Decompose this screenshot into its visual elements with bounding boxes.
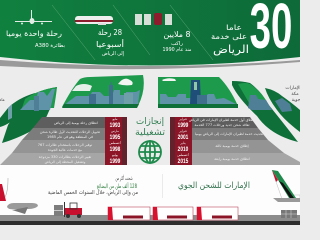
icon: cargo container 1 xyxy=(108,207,150,220)
left table text: توفير الرحلات باستخدام طائرات 767 xyxy=(38,143,92,148)
skyline panel: right leaf xyxy=(232,81,298,142)
right table years: فبراير xyxy=(178,129,187,133)
left table years: مارس xyxy=(111,129,119,133)
left table text xyxy=(38,121,100,165)
stat: passengers xyxy=(162,30,192,53)
divider xyxy=(161,174,164,198)
text block: cargo statistic: شحنت أكثر من xyxy=(116,174,133,182)
right table text: تعاقد شحن جديد ورحلات 777 الخدمة xyxy=(195,123,250,127)
header banner xyxy=(0,0,300,69)
title: 30 years serving Riyadh: عاما xyxy=(226,23,242,32)
stat: weekly flights: أسبوعيا xyxy=(96,39,124,49)
left table years xyxy=(109,117,121,165)
stat: weekly flights xyxy=(96,28,125,57)
right table years: فبراير xyxy=(178,117,187,121)
left table years: 1999 xyxy=(110,159,120,165)
panel: right timeline table xyxy=(170,117,300,165)
skyline panel: left leaf xyxy=(2,87,57,143)
right table text: انطلاق أول خدمة لطيران الإمارات في الرياض xyxy=(189,117,255,123)
right table text xyxy=(189,117,263,161)
heading: operational achievements: تشغيلية xyxy=(135,128,166,138)
text block: right side caption: مكة xyxy=(291,91,299,97)
text block: cargo statistic: 128 ألف طن من البضائع xyxy=(97,182,137,190)
stat: weekly flights: إلى الرياض xyxy=(102,51,125,57)
right table years xyxy=(177,117,189,165)
right table text: انطلاق خدمة يومية رابعة xyxy=(214,157,250,161)
left table years: 1995 xyxy=(110,135,120,141)
stat: passengers: 8 ملايين xyxy=(164,30,190,39)
right table years: أغسطس xyxy=(177,153,189,157)
left table text: تحويل الرحلات للتحديث لأول طائرة شحن xyxy=(40,129,100,134)
right table years: 1999 xyxy=(178,123,188,129)
skyline panel: centre-right leaf xyxy=(158,77,238,108)
heading: operational achievements xyxy=(135,117,166,138)
stat: daily flight xyxy=(6,29,65,49)
skyline panel: centre-left leaf xyxy=(62,75,144,108)
title: 30 years serving Riyadh xyxy=(211,0,292,63)
heading: operational achievements: إنجازات xyxy=(136,117,164,127)
title: 30 years serving Riyadh: الرياض xyxy=(213,43,249,56)
stat: passengers: منذ عام 1990 xyxy=(162,47,192,53)
left table text: مع خدمات عالية الجودة xyxy=(48,148,82,152)
skyline panel: far left leaf xyxy=(0,93,35,127)
icon: stacked boxes xyxy=(54,205,63,216)
stat: daily flight: بطائرة A380 xyxy=(35,43,65,49)
left table years: 1993 xyxy=(110,123,120,129)
stat: passengers: راكب xyxy=(171,41,184,47)
right table years: 2010 xyxy=(178,147,188,153)
skyline panel: far right leaf xyxy=(265,88,300,132)
left table text: في المنطقة وهو في عام 1985 xyxy=(47,135,93,140)
left table years: 1998 xyxy=(110,147,120,153)
text block: right side caption xyxy=(285,86,301,103)
icon: forklift xyxy=(64,202,82,218)
right table years: يناير xyxy=(179,141,186,145)
right table years: 2001 xyxy=(178,135,188,141)
left table text: انطلاق رحلة يومية إلى الرياض xyxy=(54,121,98,126)
left table text: تغيير الرحلات بطائرات 330 مزدوجة xyxy=(39,155,91,159)
icon: cargo container 2 xyxy=(153,207,193,220)
stat: weekly flights: 28 رحلة xyxy=(98,28,122,37)
icon: cargo plane left xyxy=(0,178,38,214)
panel: left timeline table xyxy=(0,117,127,165)
left table years: أغسطس xyxy=(109,141,121,145)
icon: cargo boxes right xyxy=(281,210,297,218)
text block: cargo statistic xyxy=(48,174,138,196)
left table years: مايو xyxy=(112,117,118,121)
icon: seats xyxy=(135,13,172,25)
ground strip xyxy=(0,215,300,225)
text block: cargo statistic: من وإلى الرياض، خلال السنوات الخمس الماضية xyxy=(48,190,138,196)
title: 30 years serving Riyadh: على خدمة xyxy=(211,32,247,41)
stat: daily flight: رحلة واحدة يوميا xyxy=(6,29,62,38)
icon: cargo container 3 xyxy=(197,207,238,220)
icon: airplane side view xyxy=(75,16,113,25)
icon: globe xyxy=(139,141,161,163)
right table text: إطلاق خدمة يومية ثالثة xyxy=(215,144,249,149)
right table text: تحديث خدمة لطيران الإمارات إلى الرياض يوميا xyxy=(195,132,263,137)
left table years: يوليو xyxy=(111,153,118,157)
icon: airplane top view xyxy=(15,10,52,24)
icon: Emirates tail xyxy=(272,170,300,202)
right table years: 2015 xyxy=(178,159,188,165)
heading: Emirates SkyCargo: الإمارات للشحن الجوي xyxy=(178,181,250,191)
left table text: وتشغيل المحطة إلى الرياض xyxy=(45,160,86,165)
section: air cargo background xyxy=(0,165,300,215)
